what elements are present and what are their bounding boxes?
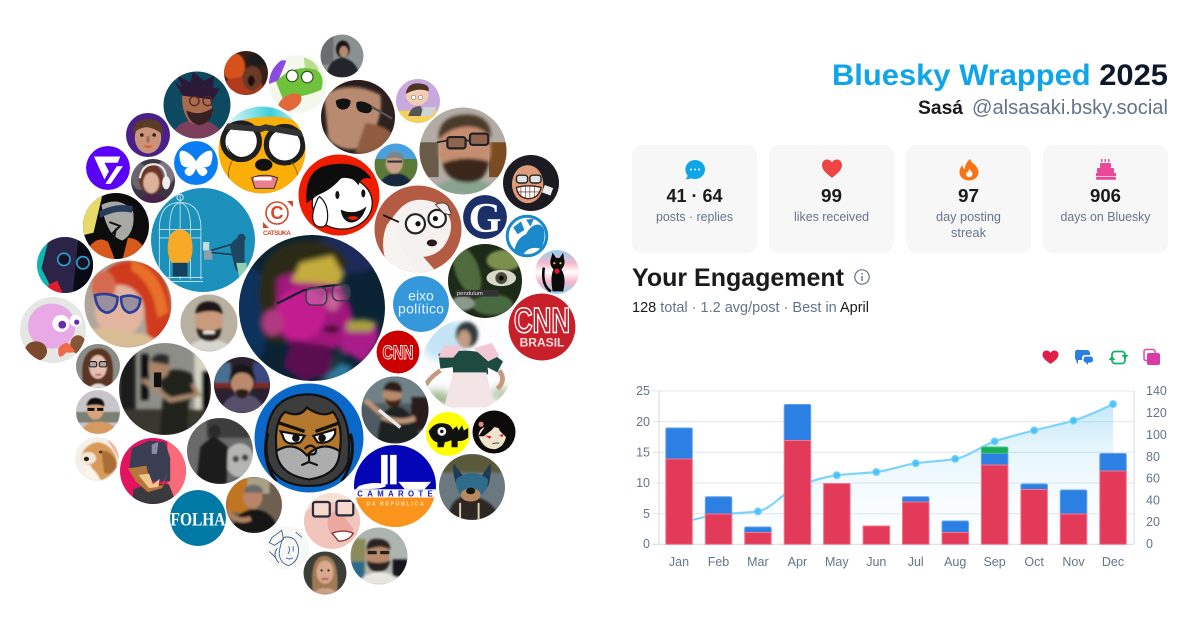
left axis labels: 25	[636, 384, 650, 398]
avatar: yellow doodle logo	[426, 412, 470, 456]
avatar: purple 3d character	[126, 113, 170, 157]
avatar: Folha logo	[170, 490, 226, 546]
legend icon: replies	[1075, 350, 1093, 365]
bars: replies	[666, 404, 1126, 534]
panel: avatar bubble cluster	[20, 34, 579, 594]
avatar: CNN logo	[376, 330, 420, 374]
avatar: CNN Brasil logo	[508, 294, 576, 360]
right axis labels: 60	[1146, 472, 1160, 486]
icon: info	[855, 270, 869, 284]
avatar: woman with red hair	[84, 260, 172, 348]
logo: Catsuka	[263, 201, 293, 237]
avatar: man in leather jacket	[320, 34, 364, 78]
avatar: man with glasses and beard	[420, 108, 506, 194]
legend icon: reposts	[1108, 352, 1128, 364]
avatar: black cat on trans flag	[535, 250, 579, 294]
avatar: CNN logo: CNN	[383, 342, 413, 364]
avatar: cartoon dog with glasses	[374, 186, 462, 272]
avatar: map of Europe	[506, 214, 548, 258]
logo: Catsuka: CATSUKA	[263, 230, 291, 237]
stat card: likes received	[769, 145, 894, 253]
heading: Your Engagement: Your Engagement	[632, 264, 845, 292]
legend icon: likes	[1042, 350, 1058, 364]
left axis labels: 20	[636, 415, 650, 429]
left axis labels: 5	[643, 507, 650, 521]
avatar: Folha logo: FOLHA	[171, 509, 226, 530]
month labels: Nov	[1062, 555, 1085, 569]
left axis labels: 15	[636, 446, 650, 460]
avatar: Camarote da Republica logo	[354, 445, 436, 527]
avatar: Darth Vader with glasses	[37, 237, 93, 293]
avatar: man in black t-shirt	[226, 477, 282, 533]
bars: likes	[666, 440, 1126, 544]
icon: heart	[822, 160, 842, 178]
avatar: Eixo Politico logo: eixo	[408, 288, 434, 304]
avatar: Camarote da Republica logo: DA REPÚBLICA	[366, 501, 424, 508]
month labels: Apr	[788, 555, 807, 569]
avatar: lilac cartoon with laptop	[396, 79, 440, 123]
avatar: anime girl	[472, 410, 516, 454]
avatar: Eixo Politico logo: político	[398, 301, 444, 317]
avatar: comic character with goggles	[83, 193, 149, 259]
stat card: posts and replies	[632, 145, 757, 253]
avatar: red close-up face	[222, 51, 268, 95]
month labels: Jun	[866, 555, 886, 569]
month labels: Oct	[1024, 555, 1044, 569]
right axis labels: 120	[1146, 406, 1167, 420]
avatar: shirtless man with sunglasses	[76, 390, 120, 434]
stat card: days on Bluesky	[1043, 145, 1168, 253]
right axis labels: 140	[1146, 384, 1167, 398]
right axis labels: 80	[1146, 450, 1160, 464]
avatar: Pendulum album art: pendulum	[457, 291, 483, 297]
avatar: black-haired cartoon on red	[298, 154, 380, 236]
avatar: person in maid dress	[423, 319, 510, 408]
avatar: Bluesky butterfly	[174, 141, 218, 185]
stat value: 906	[1090, 186, 1121, 206]
month labels: Jan	[669, 555, 689, 569]
legend icon: quotes	[1144, 350, 1160, 365]
avatar: purple V logo	[86, 146, 130, 190]
avatar: Camarote da Republica logo: CAMAROTE	[357, 489, 433, 498]
month labels: Jul	[908, 555, 924, 569]
stat value: 41 · 64	[666, 186, 722, 206]
avatar: light bulb in a cage	[151, 188, 255, 292]
avatar: pixel art portrait	[120, 438, 186, 504]
avatar: Eixo Politico logo	[393, 276, 449, 332]
stat card: day posting streak	[906, 145, 1031, 253]
avatar: man outdoors by a lake	[374, 144, 418, 186]
right axis labels: 20	[1146, 515, 1160, 529]
month labels: Feb	[708, 555, 729, 569]
avatar: long-haired man	[214, 357, 270, 413]
right axis labels: 40	[1146, 494, 1160, 508]
cumulative points	[676, 401, 1116, 527]
avatar: smiling bearded man	[180, 294, 238, 352]
stat label: days on Bluesky	[1060, 209, 1151, 224]
avatar: dog fursuit	[439, 454, 505, 520]
avatar: main profile portrait	[233, 232, 388, 381]
stat value: 97	[958, 186, 979, 206]
engagement chart	[636, 384, 1167, 569]
engagement summary: 128 total · 1.2 avg/post · Best in April	[632, 300, 869, 316]
stat label: posts · replies	[656, 209, 733, 224]
avatar: green monster drawing	[269, 55, 327, 115]
stat value: 99	[821, 186, 842, 206]
logo: Catsuka: C	[270, 203, 284, 223]
avatar: golden retriever	[75, 437, 119, 481]
avatar: CNN Brasil logo: BRASIL	[520, 335, 564, 349]
avatar: man with glasses at desk	[350, 528, 408, 584]
avatar: illustrated bearded man	[164, 72, 230, 138]
right axis labels: 0	[1146, 537, 1153, 551]
stat label second line: streak	[951, 225, 986, 240]
user name: Sasá	[918, 98, 963, 119]
avatar: pink toy creature	[20, 297, 86, 363]
avatar: CNN Brasil logo: CNN	[514, 301, 570, 340]
cumulative line	[679, 404, 1113, 524]
bars: reposts	[981, 447, 1008, 453]
month labels: Sep	[983, 555, 1006, 569]
month labels: Dec	[1102, 555, 1124, 569]
cumulative area	[679, 404, 1113, 544]
month labels: Aug	[944, 555, 966, 569]
month labels: Mar	[747, 555, 769, 569]
avatar: man with sunglasses close up	[321, 80, 395, 154]
title: Bluesky Wrapped 2025	[832, 59, 1168, 92]
avatar: muscular man in dark shirt	[362, 376, 431, 444]
avatar: blue pen sketch	[265, 526, 309, 570]
avatar: mirror selfie man	[119, 343, 211, 437]
avatar: cartoon face with glasses	[304, 493, 360, 549]
icon: cake	[1096, 159, 1116, 180]
month labels	[669, 555, 1124, 569]
avatar: G logo: G	[469, 195, 501, 242]
icon: flame	[960, 159, 978, 180]
avatar: cartoon man with dreadlocks	[254, 384, 364, 492]
stat label: day posting	[936, 209, 1001, 224]
right axis labels	[1146, 384, 1167, 551]
left axis labels	[636, 384, 650, 551]
avatar: black and white photo	[187, 418, 254, 484]
icon: chat bubble	[685, 160, 705, 179]
avatar: woman with headset	[131, 159, 175, 203]
right axis labels: 100	[1146, 428, 1167, 442]
avatar: bald grinning cartoon	[503, 155, 559, 211]
left axis labels: 10	[636, 476, 650, 490]
left axis labels: 0	[643, 537, 650, 551]
avatar: Pendulum album art	[448, 243, 522, 318]
stat label: likes received	[794, 209, 869, 224]
month labels: May	[825, 555, 849, 569]
avatar: Jake the dog with glasses	[218, 106, 306, 194]
chart legend	[1042, 350, 1160, 365]
avatar: woman with glasses and brown hair	[76, 344, 120, 388]
avatar: blonde woman	[304, 552, 346, 594]
user handle: @alsasaki.bsky.social	[972, 97, 1168, 119]
